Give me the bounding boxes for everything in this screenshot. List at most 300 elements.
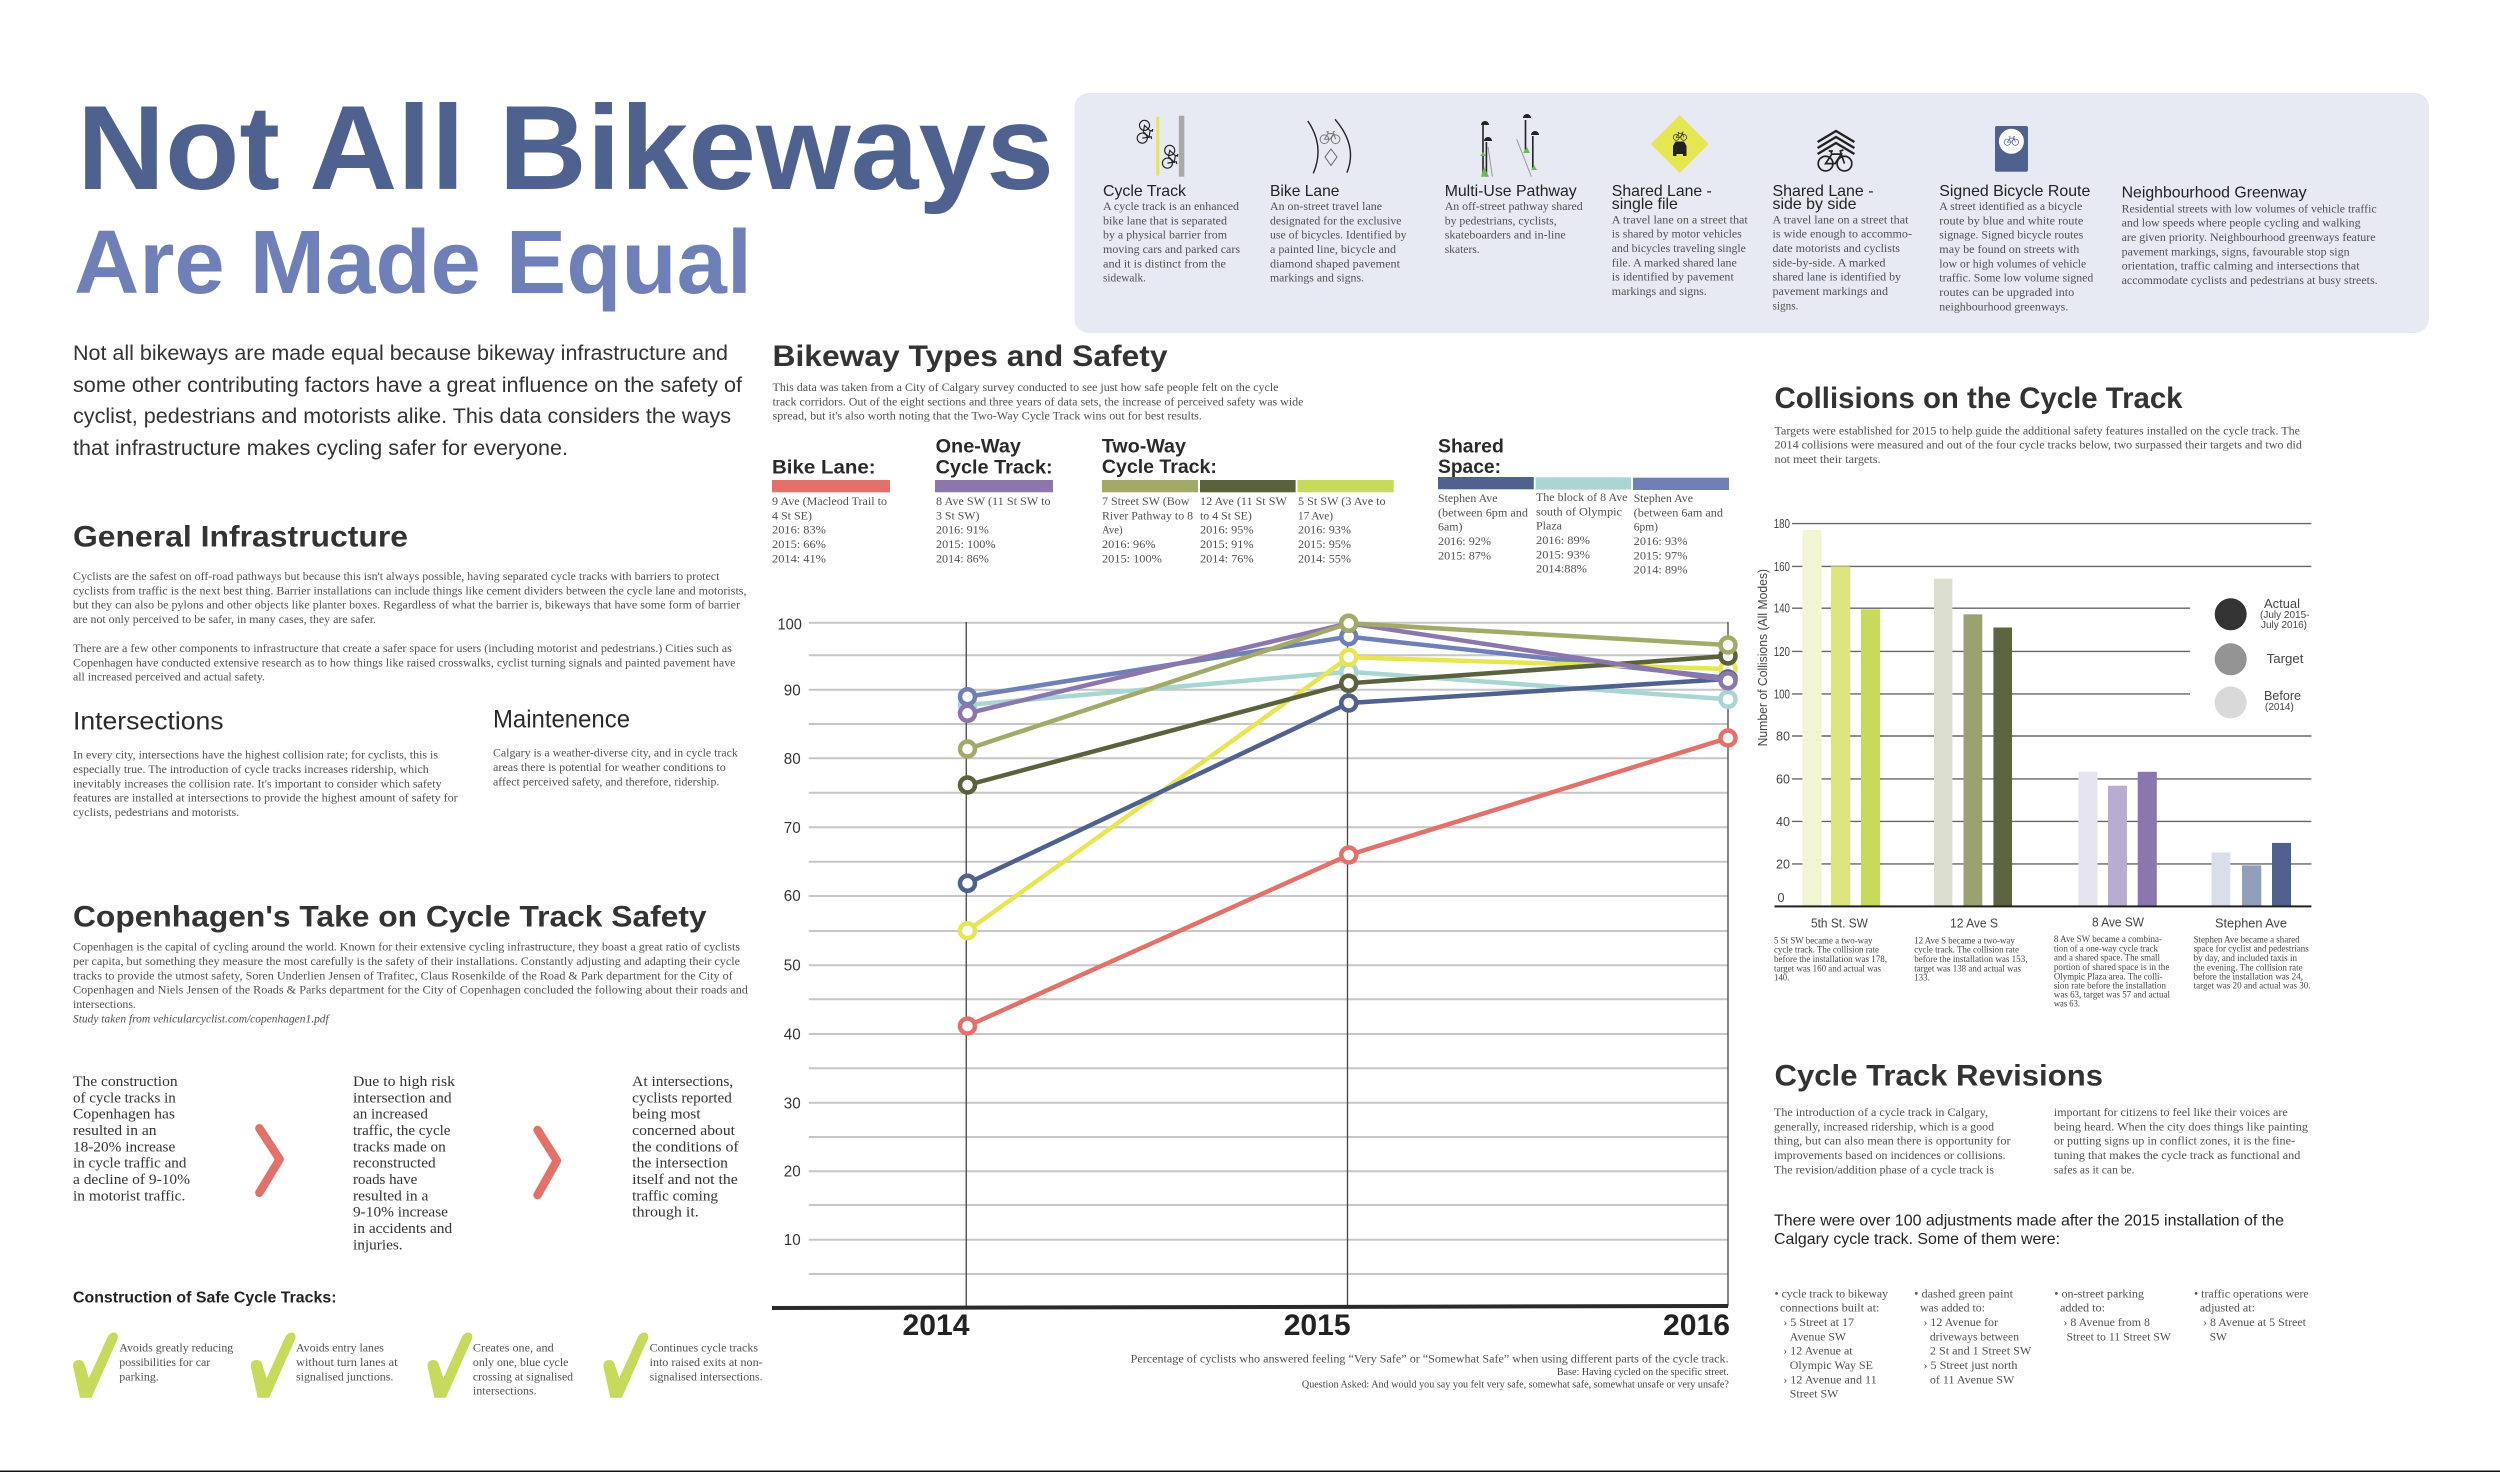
legend: one-way cycle track	[935, 436, 1053, 565]
subsection: intersections: Intersections	[73, 707, 224, 735]
intro text: that infrastructure makes cycling safer for everyone.	[73, 437, 568, 460]
legend: two-way cycle track: 2015: 95%	[1298, 537, 1351, 551]
checklist item 1: possibilities for car	[119, 1355, 210, 1369]
y axis labels: 60	[1776, 771, 1790, 786]
finding 3: through it.	[632, 1205, 699, 1221]
series: Stephen Ave day	[960, 629, 1736, 704]
definition: multi-use pathway: An off-street pathway shared	[1445, 199, 1583, 213]
definition: neighbourhood greenway: are given priority. Neighbourhood greenways feature	[2122, 230, 2376, 244]
subsection: intersections: especially true. The introduction of cycle tracks increases ridership, which	[73, 762, 429, 776]
definition: signed bicycle route: may be found on streets with	[1939, 242, 2079, 256]
y axis labels	[778, 616, 802, 1249]
definition: shared lane side by side: side by side	[1772, 196, 1857, 213]
checklist item 3	[427, 1332, 573, 1398]
bars: 12 Ave S	[1934, 579, 2012, 906]
legend: bike lane: 9 Ave (Macleod Trail to	[772, 494, 887, 508]
y axis labels: 80	[1776, 728, 1790, 743]
y axis labels: 20	[784, 1164, 801, 1181]
definition: signed bicycle route: low or high volumes of vehicle	[1939, 256, 2086, 270]
checklist item 1: Avoids greatly reducing	[119, 1341, 233, 1355]
subsection: intersections: features are installed at intersections to provide the highest amount of safety for	[73, 791, 458, 805]
checklist item 2	[251, 1332, 398, 1398]
list: green paint: was added to:	[1920, 1301, 1985, 1315]
finding 2: traffic, the cycle	[353, 1123, 451, 1139]
legend: shared space: 2015: 93%	[1536, 547, 1590, 561]
list: connections: › 5 Street at 17	[1783, 1315, 1854, 1329]
note: 12 Ave S: target was 138 and actual was	[1914, 963, 2021, 974]
definition: shared lane single file: is shared by motor vehicles	[1612, 227, 1742, 241]
finding 2: tracks made on	[353, 1139, 446, 1155]
description: track corridors. Out of the eight sections and three years of data sets, the increase of perceived safety was wide	[772, 394, 1304, 408]
definition: multi-use pathway: Multi-Use Pathway	[1445, 183, 1577, 200]
description: Targets were established for 2015 to help guide the additional safety features installed on the cycle track. The	[1774, 423, 2300, 437]
legend: two-way cycle track: 2014: 55%	[1298, 551, 1351, 565]
note: 8 Ave SW	[2054, 915, 2170, 1010]
checklist item 4	[603, 1332, 763, 1398]
note: 8 Ave SW: was 63, target was 57 and actual	[2054, 990, 2170, 1001]
definition: shared lane side by side: is wide enough to accommo-	[1772, 227, 1912, 241]
title	[74, 81, 1054, 313]
checklist item 3: crossing at signalised	[473, 1369, 573, 1383]
legend: shared space: 2016: 92%	[1438, 534, 1491, 548]
definition: neighbourhood greenway: Residential streets with low volumes of vehicle traffic	[2122, 201, 2377, 215]
definition: neighbourhood greenway: orientation, traffic calming and intersections that	[2122, 259, 2360, 273]
body text: The introduction of a cycle track in Calgary,	[1774, 1105, 1988, 1119]
note: 5th St SW: before the installation was 178,	[1774, 954, 1887, 965]
legend: two-way cycle track: to 4 St SE)	[1200, 508, 1252, 522]
legend: shared space: south of Olympic	[1536, 504, 1622, 518]
definition: cycle track	[1103, 183, 1240, 285]
legend: one-way cycle track: 2016: 91%	[936, 523, 989, 537]
finding 2: 9-10% increase	[353, 1205, 448, 1221]
chart caption: Base: Having cycled on the specific street.	[1557, 1367, 1729, 1378]
legend: shared space: 6am)	[1438, 520, 1463, 534]
subsection: maintenance	[493, 705, 738, 788]
description: not meet their targets.	[1774, 452, 1880, 466]
legend: one-way cycle track: 2014: 86%	[936, 551, 989, 565]
legend: two-way cycle track: 2014: 76%	[1200, 551, 1254, 565]
series: 12 Ave	[960, 648, 1736, 792]
icon: cycle track	[1136, 116, 1184, 177]
list: connections	[1774, 1286, 1888, 1401]
title: Not All Bikeways	[77, 81, 1054, 215]
chart legend: (2014)	[2265, 701, 2294, 713]
y axis title: Number of Collisions (All Modes)	[1755, 569, 1770, 746]
body text: improvements based on incidences or collisions.	[1774, 1148, 2006, 1162]
note: 5th St SW: cycle track. The collision rate	[1774, 945, 1879, 956]
list: connections: › 12 Avenue and 11	[1783, 1372, 1877, 1386]
panel: collisions on the cycle track	[1755, 382, 2311, 1010]
checklist item 4: into raised exits at non-	[650, 1355, 763, 1369]
definition: shared lane single file: file. A marked shared lane	[1612, 255, 1737, 269]
definition: cycle track: sidewalk.	[1103, 271, 1146, 285]
panel: bikeway type definitions	[1074, 93, 2429, 333]
arrow: chevron 1	[259, 1128, 280, 1193]
y axis labels: 100	[1774, 686, 1790, 701]
note: 8 Ave SW: 8 Ave SW	[2092, 915, 2145, 930]
note: 5th St SW: target was 160 and actual was	[1774, 963, 1881, 974]
list: connections: Avenue SW	[1790, 1329, 1847, 1343]
legend: two-way cycle track: 2015: 91%	[1200, 537, 1254, 551]
list: green paint: • dashed green paint	[1914, 1286, 2014, 1300]
note: 8 Ave SW: tion of a one-way cycle track	[2054, 943, 2158, 954]
icon: multi-use pathway	[1480, 114, 1539, 177]
definition: neighbourhood greenway: pavement markings, signs, favourable stop sign	[2122, 244, 2350, 258]
note: Stephen Ave: Stephen Ave became a shared	[2194, 934, 2300, 945]
intro text: cyclist, pedestrians and motorists alike. This data considers the ways	[73, 405, 731, 428]
statement: There were over 100 adjustments made after the 2015 installation of the	[1774, 1212, 2284, 1229]
definition: signed bicycle route: signage. Signed bicycle routes	[1939, 228, 2084, 242]
definition: cycle track: moving cars and parked cars	[1103, 242, 1240, 256]
bars: 8 Ave SW	[2078, 772, 2157, 906]
finding 1: 18-20% increase	[73, 1139, 176, 1155]
body text: all increased perceived and actual safety.	[73, 670, 265, 684]
note: Stephen Ave: the evening. The collision rate	[2194, 962, 2303, 973]
definition: shared lane single file: Shared Lane -	[1612, 183, 1712, 200]
line chart: perceived safety	[772, 616, 1736, 1342]
description	[1774, 423, 2302, 466]
legend: bike lane: 4 St SE)	[772, 508, 812, 522]
legend: shared space: Stephen Ave	[1438, 491, 1498, 505]
list: green paint: › 12 Avenue for	[1923, 1315, 1998, 1329]
definition: multi-use pathway: by pedestrians, cyclists,	[1445, 213, 1557, 227]
definition: bike lane: use of bicycles. Identified by	[1270, 228, 1406, 242]
series: Stephen Ave night	[960, 672, 1736, 891]
definition: multi-use pathway: skateboarders and in-line	[1445, 228, 1566, 242]
note: 5th St SW: 140.	[1774, 972, 1789, 983]
legend: two-way cycle track: 2016: 93%	[1298, 523, 1351, 537]
chart caption: Question Asked: And would you say you felt very safe, somewhat safe, somewhat unsafe or very unsafe?	[1302, 1379, 1729, 1390]
legend: one-way cycle track: One-Way	[936, 436, 1021, 458]
finding 1: in motorist traffic.	[73, 1188, 185, 1204]
description: This data was taken from a City of Calgary survey conducted to see just how safe people felt on the cycle	[772, 380, 1278, 394]
chart legend	[2215, 596, 2310, 718]
body text: Copenhagen is the capital of cycling around the world. Known for their extensive cycling infrastructure, they boast a great ratio of cyclists	[73, 940, 740, 954]
definition: multi-use pathway	[1445, 183, 1583, 256]
definition: signed bicycle route: traffic. Some low volume signed	[1939, 271, 2093, 285]
note: 8 Ave SW: and a shared space. The small	[2054, 953, 2160, 964]
legend: bike lane: 2014: 41%	[772, 551, 826, 565]
statement	[1774, 1212, 2284, 1248]
list: connections: Street SW	[1790, 1387, 1839, 1401]
finding 2: injuries.	[353, 1237, 403, 1253]
finding 1: of cycle tracks in	[73, 1090, 176, 1106]
note: 12 Ave S: 12 Ave S	[1950, 915, 1998, 930]
chart legend: July 2016)	[2261, 619, 2307, 631]
body text: being heard. When the city does things like painting	[2054, 1119, 2308, 1133]
legend: two-way cycle track: 2015: 100%	[1102, 551, 1162, 565]
definition: shared lane side by side: side-by-side. A marked	[1772, 255, 1886, 269]
bars: Stephen Ave	[2212, 843, 2291, 906]
checklist item 1: parking.	[119, 1369, 159, 1383]
legend: shared space: Shared	[1438, 436, 1504, 458]
list: traffic operations: • traffic operations were	[2194, 1286, 2309, 1300]
panel: copenhagen	[73, 901, 763, 1398]
series: 5 St SW	[960, 650, 1736, 938]
subsection: intersections: In every city, intersections have the highest collision rate; for cyclists, this is	[73, 748, 438, 762]
finding 2: in accidents and	[353, 1221, 453, 1237]
finding 2: Due to high risk	[353, 1074, 456, 1090]
y axis labels: 80	[784, 751, 801, 768]
y axis labels: 20	[1776, 856, 1790, 871]
note: 12 Ave S: cycle track. The collision rate	[1914, 945, 2019, 956]
finding 2: intersection and	[353, 1090, 452, 1106]
subsection: intersections: inevitably increases the collision rate. It's important to consider which safety	[73, 776, 442, 790]
legend: two-way cycle track: 12 Ave (11 St SW	[1200, 494, 1288, 508]
legend: shared space: 2016: 89%	[1536, 533, 1590, 547]
x axis labels: 2015	[1284, 1309, 1351, 1342]
heading: construction of safe cycle tracks: Construction of Safe Cycle Tracks:	[73, 1290, 336, 1307]
chart caption	[1131, 1352, 1729, 1390]
legend: one-way cycle track: 8 Ave SW (11 St SW to	[936, 494, 1051, 508]
legend: shared space: (between 6am and	[1634, 505, 1723, 519]
body text: Cyclists are the safest on off-road pathways but because this isn't always possible, having separated cycle tracks with barriers to protect	[73, 569, 720, 583]
list: parking: Street to 11 Street SW	[2066, 1329, 2172, 1343]
chart legend: Target	[2267, 651, 2304, 666]
x axis labels: 2016	[1663, 1309, 1730, 1342]
intro text	[73, 342, 742, 460]
statement: Calgary cycle track. Some of them were:	[1774, 1231, 2060, 1248]
definition: signed bicycle route: A street identified as a bicycle	[1939, 199, 2082, 213]
definition: bike lane: markings and signs.	[1270, 271, 1364, 285]
intro text: some other contributing factors have a great influence on the safety of	[73, 374, 742, 397]
note: Stephen Ave	[2194, 915, 2311, 992]
definition: signed bicycle route: route by blue and white route	[1939, 213, 2083, 227]
definition: shared lane side by side	[1772, 183, 1912, 312]
y axis labels: 100	[778, 616, 802, 633]
y axis labels: 180	[1774, 516, 1790, 531]
definition: cycle track: by a physical barrier from	[1103, 228, 1228, 242]
legend: two-way cycle track: Two-Way	[1102, 436, 1186, 458]
legend: two-way cycle track: Ave)	[1102, 523, 1122, 537]
legend: bike lane	[772, 456, 890, 565]
subsection: maintenance: Maintenence	[493, 705, 630, 733]
body text: thing, but can also mean there is opportunity for	[1774, 1134, 2011, 1148]
list: parking: › 8 Avenue from 8	[2063, 1315, 2150, 1329]
definition: shared lane side by side: A travel lane on a street that	[1772, 212, 1909, 226]
y axis labels: 40	[1776, 814, 1790, 829]
note: Stephen Ave: before the installation was 24,	[2194, 971, 2303, 982]
legend: two-way cycle track: 2016: 95%	[1200, 523, 1254, 537]
finding 1: The construction	[73, 1074, 178, 1090]
description: 2014 collisions were measured and out of the four cycle tracks below, two surpassed their targets and two did	[1774, 438, 2302, 452]
finding 1: resulted in an	[73, 1123, 157, 1139]
checklist item 2: signalised junctions.	[296, 1369, 393, 1383]
body text	[1774, 1105, 2308, 1176]
checklist item 1	[73, 1332, 233, 1398]
body text: are not only perceived to be safer, in many cases, they are safer.	[73, 612, 376, 626]
y axis labels: 60	[784, 888, 801, 905]
legend: shared space: 2014:88%	[1536, 562, 1587, 576]
definition: cycle track: bike lane that is separated	[1103, 213, 1227, 227]
subsection: maintenance: Calgary is a weather-diverse city, and in cycle track	[493, 746, 738, 760]
definition: signed bicycle route: Signed Bicycle Route	[1939, 183, 2090, 200]
body text: or putting signs up in conflict zones, it is the fine-	[2054, 1134, 2295, 1148]
note: 12 Ave S	[1914, 915, 2028, 983]
legend: two-way cycle track: 2016: 96%	[1102, 537, 1156, 551]
list: green paint: › 5 Street just north	[1923, 1358, 2018, 1372]
definition: bike lane: Bike Lane	[1270, 183, 1340, 200]
legend: shared space: Stephen Ave	[1634, 491, 1693, 505]
body text: cyclists from traffic is the next best thing. Barrier installations can include things like cement dividers between the cycle lane and motorists,	[73, 583, 746, 597]
x axis labels: 2014	[902, 1309, 970, 1342]
definition: bike lane: diamond shaped pavement	[1270, 256, 1401, 270]
note: 8 Ave SW: Olympic Plaza area. The colli-	[2054, 971, 2162, 982]
finding 3	[632, 1074, 739, 1221]
legend: bike lane: Bike Lane:	[772, 456, 876, 478]
finding 3: the intersection	[632, 1156, 729, 1172]
list: traffic operations: › 8 Avenue at 5 Street	[2203, 1315, 2307, 1329]
list: traffic operations: SW	[2210, 1329, 2228, 1343]
body text: per capita, but something they measure the most carefully is the safety of their installations. Constantly adjusting and adapting their cycle	[73, 954, 740, 968]
checklist item 4: signalised intersections.	[650, 1369, 763, 1383]
body text: tuning that makes the cycle track as functional and	[2054, 1148, 2300, 1162]
list: connections: connections built at:	[1780, 1301, 1879, 1315]
note: Stephen Ave: space for cyclist and pedestrians	[2194, 944, 2309, 955]
body text: Study taken from vehicularcyclist.com/copenhagen1.pdf	[73, 1011, 330, 1025]
finding 1: Copenhagen has	[73, 1107, 175, 1123]
x axis labels	[902, 1309, 1730, 1342]
subsection: maintenance: affect perceived safety, and therefore, ridership.	[493, 774, 719, 788]
title: Are Made Equal	[74, 213, 752, 313]
finding 2: reconstructed	[353, 1156, 436, 1172]
finding 2: an increased	[353, 1107, 428, 1123]
definition: bike lane: An on-street travel lane	[1270, 199, 1382, 213]
y axis labels: 30	[784, 1095, 801, 1112]
definition: shared lane single file: and bicycles traveling single	[1612, 241, 1746, 255]
definition: shared lane single file: markings and signs.	[1612, 284, 1707, 298]
legend: one-way cycle track: 3 St SW)	[936, 508, 979, 522]
y axis labels: 50	[784, 958, 801, 975]
intro text: Not all bikeways are made equal because bikeway infrastructure and	[73, 342, 728, 365]
arrow: chevron 2	[538, 1130, 557, 1195]
panel: general infrastructure	[73, 521, 746, 819]
finding 1: in cycle traffic and	[73, 1156, 187, 1172]
definition: cycle track: and it is distinct from the	[1103, 256, 1226, 270]
definition: shared lane side by side: pavement markings and	[1772, 284, 1888, 298]
y axis labels: 0	[1778, 890, 1784, 905]
finding 3: At intersections,	[632, 1074, 733, 1090]
legend: shared space: The block of 8 Ave	[1536, 490, 1628, 504]
note: 12 Ave S: before the installation was 153,	[1914, 954, 2028, 965]
definition: bike lane: a painted line, bicycle and	[1270, 242, 1396, 256]
note: 12 Ave S: 133.	[1914, 972, 1930, 983]
heading: Collisions on the Cycle Track	[1774, 382, 2183, 415]
heading: Copenhagen's Take on Cycle Track Safety	[73, 901, 707, 934]
y axis labels: 90	[784, 683, 801, 700]
body text: intersections.	[73, 997, 136, 1011]
list: green paint: 2 St and 1 Street SW	[1930, 1344, 2032, 1358]
series: 7 Street SW	[960, 616, 1736, 756]
legend: shared space: Plaza	[1536, 519, 1563, 533]
checklist item 3: Creates one, and	[473, 1341, 554, 1355]
legend: two-way cycle track: 7 Street SW (Bow	[1102, 494, 1190, 508]
finding 3: cyclists reported	[632, 1090, 732, 1106]
list: connections: Olympic Way SE	[1790, 1358, 1873, 1372]
finding 3: concerned about	[632, 1123, 736, 1139]
legend: shared space: Space:	[1438, 456, 1501, 478]
definition: shared lane single file: is identified by pavement	[1612, 270, 1734, 284]
finding 2: resulted in a	[353, 1188, 429, 1204]
y axis labels	[1774, 516, 1790, 905]
description	[772, 380, 1304, 423]
list: traffic operations	[2194, 1286, 2309, 1343]
description: spread, but it's also worth noting that the Two-Way Cycle Track wins out for best results.	[772, 409, 1202, 423]
icon: bike lane	[1308, 119, 1351, 173]
y axis labels: 160	[1774, 559, 1790, 574]
body text: tracks to provide the utmost safety, Soren Underlien Jensen of Trafitec, Claus Rosenkilde of the Road & Park department for the City of	[73, 968, 733, 982]
note: 8 Ave SW: portion of shared space is in the	[2054, 962, 2169, 973]
note: 12 Ave S: 12 Ave S became a two-way	[1914, 935, 2015, 946]
subsection: intersections: cyclists, pedestrians and motorists.	[73, 805, 239, 819]
list: connections: › 12 Avenue at	[1783, 1344, 1853, 1358]
icon: shared lane single file sign	[1651, 115, 1709, 173]
subsection: maintenance: areas there is potential for weather conditions to	[493, 760, 726, 774]
body text: There are a few other components to infrastructure that create a safer space for users (including motorist and pedestrians.) Cities such as	[73, 641, 732, 655]
checklist item 4: Continues cycle tracks	[650, 1341, 758, 1355]
definition: neighbourhood greenway: Neighbourhood Greenway	[2122, 185, 2307, 202]
body text	[73, 569, 746, 684]
definition: signed bicycle route: routes can be upgraded into	[1939, 285, 2074, 299]
legend: two-way cycle track: Cycle Track:	[1102, 456, 1217, 478]
heading: Bikeway Types and Safety	[772, 340, 1168, 373]
checklist item 2: Avoids entry lanes	[296, 1341, 384, 1355]
definition: cycle track: A cycle track is an enhanced	[1103, 199, 1239, 213]
bar chart: collisions	[1755, 516, 2311, 907]
heading: Cycle Track Revisions	[1774, 1059, 2103, 1092]
body text: but they can also be pylons and other objects like planter boxes. Regardless of what the barrier is, bikeways that have some form of barrier	[73, 598, 740, 612]
legend: shared space: (between 6pm and	[1438, 505, 1528, 519]
legend: shared space: 2015: 87%	[1438, 548, 1491, 562]
chart caption: Percentage of cyclists who answered feeling “Very Safe” or “Somewhat Safe” when using different parts of the cycle track.	[1131, 1352, 1729, 1366]
chart legend: (July 2015-	[2260, 609, 2310, 621]
finding 3: itself and not the	[632, 1172, 738, 1188]
finding 3: the conditions of	[632, 1139, 739, 1155]
note: Stephen Ave: target was 20 and actual was 30.	[2194, 981, 2311, 992]
body text: important for citizens to feel like their voices are	[2054, 1105, 2288, 1119]
note: 8 Ave SW: sion rate before the installation	[2054, 980, 2166, 991]
definition: signed bicycle route	[1939, 183, 2093, 313]
finding 2	[353, 1074, 456, 1253]
series: 9 Ave bike lane	[960, 730, 1736, 1034]
definition: shared lane side by side: Shared Lane -	[1772, 183, 1874, 200]
y axis labels: 140	[1774, 601, 1790, 616]
list: connections: • cycle track to bikeway	[1774, 1286, 1888, 1300]
finding 1: a decline of 9-10%	[73, 1172, 190, 1188]
legend: shared space	[1438, 436, 1729, 577]
note: Stephen Ave: Stephen Ave	[2215, 915, 2287, 930]
legend: shared space: 6pm)	[1634, 520, 1658, 534]
legend: two-way cycle track: 17 Ave)	[1298, 508, 1333, 522]
list: parking	[2054, 1286, 2172, 1343]
y axis labels: 120	[1774, 644, 1790, 659]
note: Stephen Ave: by day, and included taxis in	[2194, 953, 2297, 964]
body text	[73, 940, 748, 1025]
panel: bikeway types and safety	[772, 340, 1736, 1390]
bars: 5th St SW	[1802, 530, 1880, 906]
definition: shared lane side by side: shared lane is identified by	[1772, 270, 1901, 284]
panel: cycle track revisions	[1774, 1059, 2309, 1401]
note: 8 Ave SW: was 63.	[2054, 999, 2080, 1010]
body text: Copenhagen and Niels Jensen of the Roads & Parks department for the City of Copenhagen concluded the following about their roads and	[73, 983, 748, 997]
definition: shared lane side by side: signs.	[1772, 298, 1798, 312]
definition: neighbourhood greenway	[2122, 185, 2378, 287]
body text: The revision/addition phase of a cycle track is	[1774, 1162, 1994, 1176]
body text: safes as it can be.	[2054, 1162, 2135, 1176]
series: 8 Ave SW	[960, 616, 1736, 721]
definition: signed bicycle route: neighbourhood greenways.	[1939, 299, 2068, 313]
legend: one-way cycle track: Cycle Track:	[936, 456, 1053, 478]
